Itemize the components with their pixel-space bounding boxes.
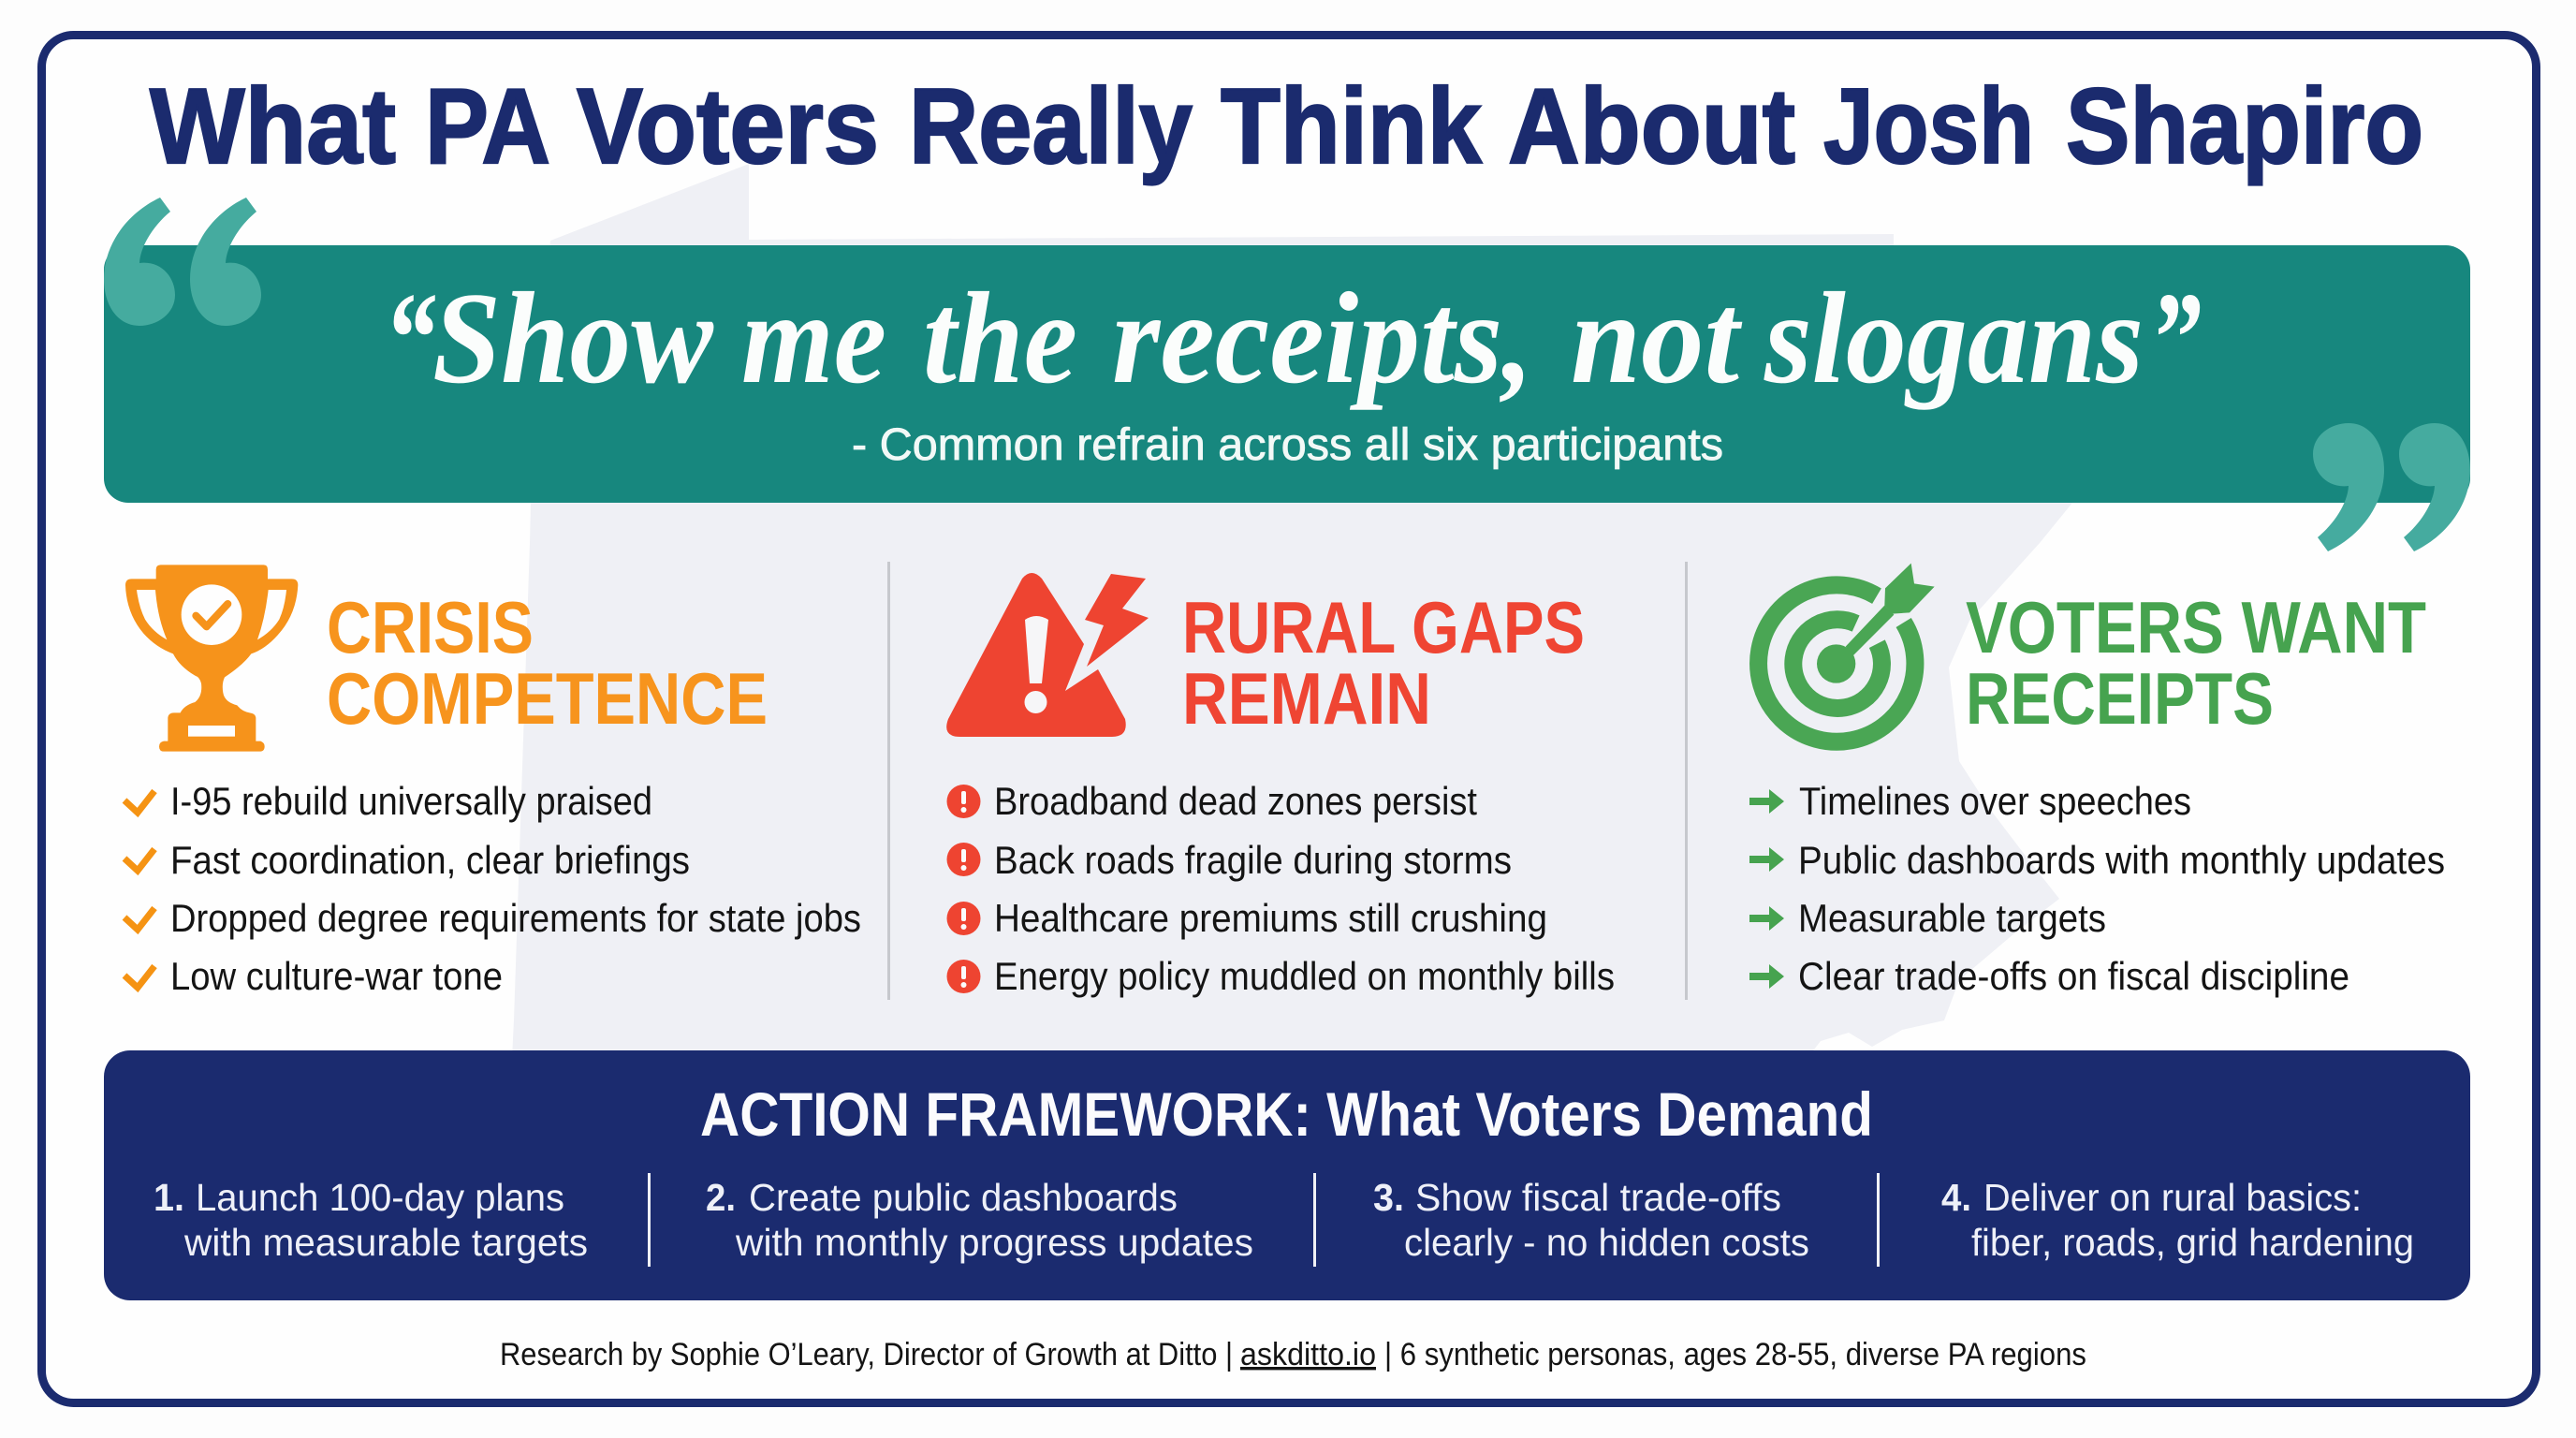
footer credit — [500, 1337, 2086, 1372]
step 2 — [706, 1176, 1253, 1264]
alert list: Energy policy muddled on monthly bills — [994, 954, 1615, 998]
footer credit: Research by Sophie O’Leary, Director of Growth at Ditto | — [500, 1337, 1233, 1372]
heading — [327, 586, 768, 740]
quote text: receipts, — [1112, 266, 1533, 411]
step 3: clearly - no hidden costs — [1404, 1221, 1809, 1264]
panel: rural gaps — [946, 573, 1615, 998]
title: What — [150, 67, 396, 186]
panel: action framework — [104, 1050, 2470, 1300]
heading: CRISIS — [327, 586, 534, 668]
icon: opening quote mark — [104, 198, 261, 326]
title: Shapiro — [2066, 67, 2423, 186]
step 4: Deliver on rural basics: — [1983, 1176, 2362, 1219]
title: PA — [425, 67, 550, 186]
quote text — [384, 266, 2202, 411]
arrow list: Measurable targets — [1798, 896, 2106, 940]
step 3: 3. — [1373, 1176, 1404, 1219]
heading — [1966, 586, 2426, 740]
arrow list: Public dashboards with monthly updates — [1798, 838, 2445, 882]
step 1 — [154, 1176, 588, 1264]
icon: closing quote mark — [2313, 423, 2470, 551]
heading: RURAL GAPS — [1182, 586, 1585, 668]
check list: Fast coordination, clear briefings — [170, 838, 690, 882]
step 2: with monthly progress updates — [735, 1221, 1253, 1264]
heading: VOTERS WANT — [1966, 586, 2426, 668]
footer credit: | 6 synthetic personas, ages 28-55, diverse PA regions — [1384, 1337, 2086, 1372]
check list: Low culture-war tone — [170, 954, 503, 998]
quote text: ” — [2149, 266, 2202, 411]
title: Really — [909, 67, 1193, 186]
step 1: 1. — [154, 1176, 184, 1219]
step 3: Show fiscal trade-offs — [1415, 1176, 1781, 1219]
quote text: slogans — [1764, 266, 2144, 411]
heading: COMPETENCE — [327, 657, 768, 740]
title — [150, 67, 2423, 186]
heading — [1182, 586, 1585, 740]
icon: warning triangle with lightning bolt — [946, 573, 1149, 737]
step 3 — [1373, 1176, 1809, 1264]
background: Pennsylvania state silhouette — [512, 164, 2072, 1058]
check list: I-95 rebuild universally praised — [170, 779, 652, 823]
step 4: 4. — [1941, 1176, 1971, 1219]
title: Josh — [1823, 67, 2034, 186]
title: About — [1508, 67, 1795, 186]
icon: trophy — [125, 565, 298, 752]
title: Think — [1221, 67, 1483, 186]
panel: voters want receipts — [1749, 564, 2445, 998]
alert list: Healthcare premiums still crushing — [994, 896, 1547, 940]
quote text: the — [923, 266, 1077, 411]
footer credit: askditto.io — [1240, 1337, 1376, 1372]
arrow list: Timelines over speeches — [1799, 779, 2191, 823]
check list: Dropped degree requirements for state jobs — [170, 896, 861, 940]
step 1: with measurable targets — [183, 1221, 588, 1264]
step 2: 2. — [706, 1176, 736, 1219]
action framework heading: ACTION FRAMEWORK: What Voters Demand — [700, 1079, 1873, 1149]
alert list: Broadband dead zones persist — [994, 779, 1477, 823]
check list — [124, 779, 861, 998]
icon: target with arrow — [1759, 564, 1935, 741]
step 4 — [1941, 1176, 2414, 1264]
panel: crisis competence — [124, 565, 861, 998]
quote text: Show — [432, 266, 714, 411]
alert list — [947, 779, 1615, 998]
heading: REMAIN — [1182, 657, 1431, 740]
title: Voters — [577, 67, 879, 186]
step 4: fiber, roads, grid hardening — [1971, 1221, 2414, 1264]
quote attribution: - Common refrain across all six participants — [852, 420, 1723, 470]
arrow list: Clear trade-offs on fiscal discipline — [1798, 954, 2349, 998]
panel: quote banner — [104, 245, 2470, 503]
step 1: Launch 100-day plans — [196, 1176, 564, 1219]
quote text: not — [1571, 266, 1743, 411]
heading: RECEIPTS — [1966, 657, 2274, 740]
quote text: “ — [384, 266, 436, 411]
alert list: Back roads fragile during storms — [994, 838, 1512, 882]
step 2: Create public dashboards — [749, 1176, 1178, 1219]
quote text: me — [741, 266, 886, 411]
arrow list — [1749, 779, 2445, 998]
